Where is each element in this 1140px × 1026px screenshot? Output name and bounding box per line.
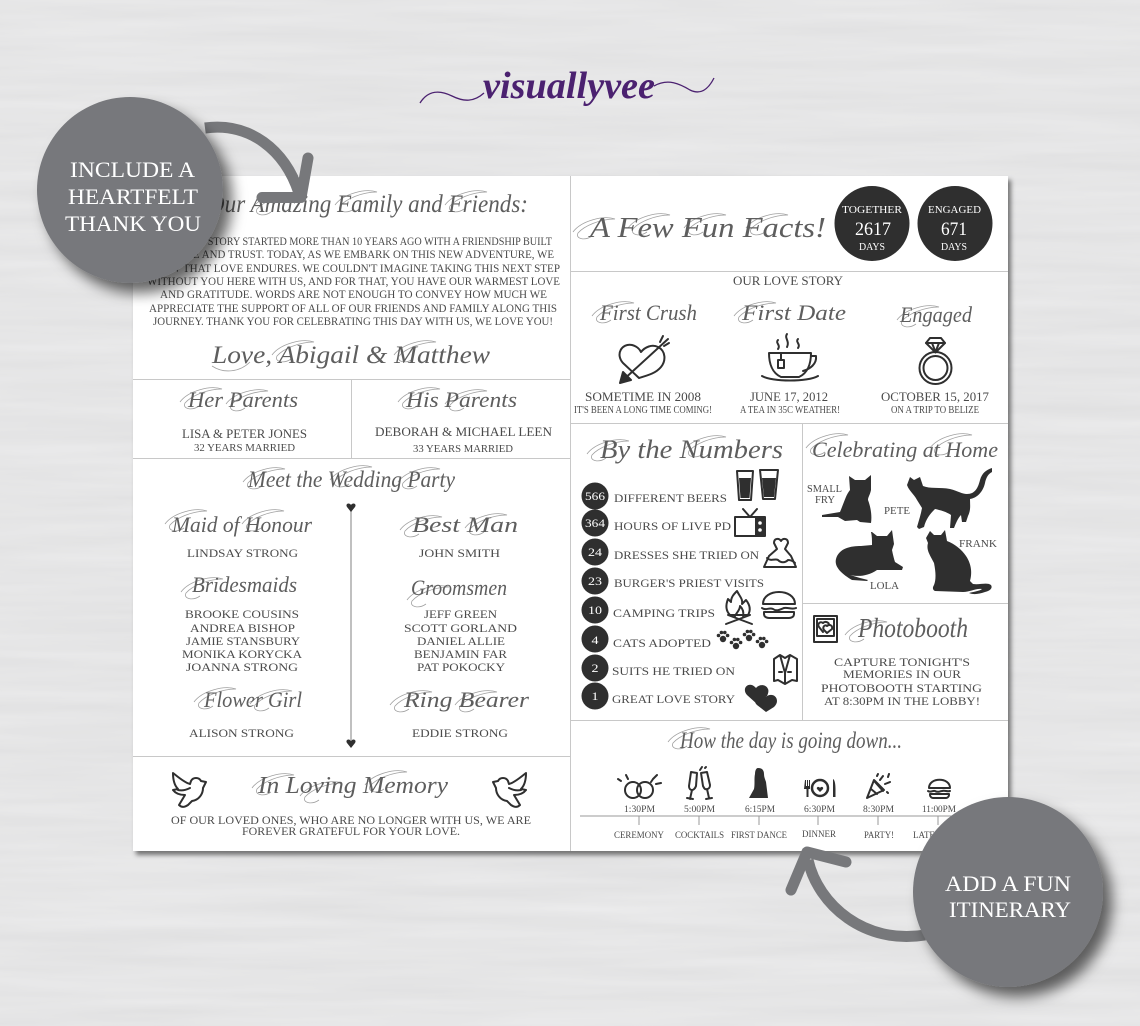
icon: plate and cutlery [804, 779, 836, 797]
stat: 10 camping trips [582, 591, 796, 624]
stat: 24 dresses she tried on: 24 [588, 545, 602, 559]
event: dinner [802, 779, 837, 840]
stat: 364 hours of live pd: 364 [585, 516, 605, 530]
icon: diamond ring [920, 338, 952, 384]
ring bearer: EDDIE STRONG [412, 726, 508, 740]
event: late night [913, 780, 965, 841]
icon: wedding dress [764, 539, 796, 567]
badge: together days [834, 186, 910, 261]
stat: 4 cats adopted: 4 [592, 633, 598, 647]
badge: together days: TOGETHER [842, 204, 903, 216]
memorial text [171, 813, 531, 838]
story: engaged: Engaged [899, 302, 973, 327]
callout: add a fun itinerary: ITINERARY [949, 897, 1071, 922]
icon: tuxedo jacket [774, 655, 797, 684]
icon: polaroid [814, 616, 837, 642]
callout: include a heartfelt thank you [37, 97, 223, 283]
icon: tea cup [762, 334, 818, 380]
cat: small fry: FRY [815, 495, 835, 506]
icon: dancing couple [749, 768, 768, 798]
story: first date: A TEA IN 35C WEATHER! [740, 405, 840, 416]
heading: by the numbers: By the Numbers [600, 435, 783, 464]
photobooth text: PHOTOBOOTH STARTING [821, 681, 982, 695]
best man [400, 512, 518, 560]
stat: 23 burger's priest visits: 23 [588, 574, 602, 588]
groomsmen: JEFF GREEN [424, 607, 497, 621]
stat: 566 different beers [582, 470, 778, 510]
letter body text: OUR LOVE STORY STARTED MORE THAN 10 YEARS AGO WITH A FRIENDSHIP BUILT [154, 234, 553, 248]
timeline axis [580, 816, 965, 825]
heading: how the day is going down: How the day is going down... [679, 728, 902, 753]
flower girl [189, 687, 302, 740]
cat: lola [836, 530, 903, 592]
best man: JOHN SMITH [419, 546, 500, 560]
stat: 10 camping trips: CAMPING TRIPS [613, 606, 715, 620]
panel: her parents [180, 387, 307, 454]
panel: photobooth [814, 613, 982, 708]
stat: 10 camping trips: 10 [588, 603, 602, 617]
letter body text: WITHOUT YOU HERE WITH US, AND FOR THAT, YOU HAVE OUR WARMEST LOVE [147, 274, 560, 288]
cat: lola: LOLA [870, 581, 899, 592]
bridesmaids: Bridesmaids [192, 572, 297, 597]
stat: 1 great love story: 1 [592, 689, 598, 703]
story: first date: JUNE 17, 2012 [750, 390, 828, 404]
heading: our love story: OUR LOVE STORY [733, 274, 843, 288]
groomsmen: DANIEL ALLIE [417, 634, 505, 648]
event: party [863, 774, 895, 841]
icon: paw prints [717, 630, 768, 649]
stat: 2 suits he tried on [582, 654, 797, 684]
event: cocktails: COCKTAILS [675, 831, 724, 841]
panel: our love story [574, 274, 989, 416]
callout: add a fun itinerary [913, 797, 1103, 987]
heading: celebrating at home: Celebrating at Home [812, 437, 998, 462]
story: engaged [881, 302, 989, 416]
groomsmen [404, 575, 517, 674]
letter body text: KNOW THAT LOVE ENDURES. WE COULDN'T IMAGINE TAKING THIS NEXT STEP [146, 261, 560, 275]
story: first crush: IT'S BEEN A LONG TIME COMING! [574, 405, 712, 416]
callout: include a heartfelt thank you: INCLUDE A [70, 157, 196, 182]
event: late night: 11:00PM [922, 805, 957, 815]
grid dividers [133, 176, 1008, 851]
event: dinner: 6:30PM [804, 805, 836, 815]
bridesmaids: JOANNA STRONG [186, 660, 298, 674]
stat: 24 dresses she tried on: DRESSES SHE TRIED ON [614, 548, 759, 562]
icon: dove left [173, 773, 206, 807]
stat: 566 different beers: DIFFERENT BEERS [614, 491, 727, 505]
maid of honour [165, 510, 312, 560]
icon: champagne glasses [687, 767, 712, 799]
bridesmaids: JAMIE STANSBURY [186, 634, 300, 648]
badge: engaged days: 671 [941, 219, 967, 240]
heading: a few fun facts: A Few Fun Facts! [588, 213, 826, 244]
panel: her parents: 32 YEARS MARRIED [194, 443, 295, 454]
panel: his parents: 33 YEARS MARRIED [413, 444, 513, 455]
story: engaged: ON A TRIP TO BELIZE [891, 405, 979, 416]
icon: television [735, 509, 765, 536]
bridesmaids: ANDREA BISHOP [190, 621, 295, 635]
bridesmaids [181, 572, 302, 674]
icon: wedding rings [618, 775, 661, 798]
ring bearer [390, 687, 530, 740]
arrow: pointing to itinerary [791, 852, 925, 937]
cat: small fry: SMALL [807, 484, 842, 495]
flower girl: Flower Girl [203, 687, 302, 712]
event: cocktails: 5:00PM [684, 805, 716, 815]
stat: 23 burger's priest visits [582, 568, 764, 594]
panel: his parents: DEBORAH & MICHAEL LEEN [375, 425, 552, 439]
heading: meet the wedding party: Meet the Wedding Party [247, 467, 456, 492]
heading: to our amazing family and friends: To Our Amazing Family and Friends: [180, 191, 528, 218]
icon: dove right [493, 773, 526, 807]
icon: burger [762, 592, 796, 618]
stat: 2 suits he tried on: 2 [592, 661, 598, 675]
badge: engaged days: DAYS [941, 242, 967, 253]
bridesmaids: BROOKE COUSINS [185, 607, 299, 621]
cat: small fry [807, 475, 871, 523]
icon: burger [928, 780, 950, 798]
photobooth text: CAPTURE TONIGHT'S [834, 655, 970, 669]
centre line with hearts [346, 504, 356, 748]
groomsmen: PAT POKOCKY [417, 660, 505, 674]
panel: itinerary timeline [580, 728, 965, 841]
event: cocktails [675, 767, 724, 841]
best man: Best Man [412, 512, 518, 537]
photobooth text: AT 8:30PM IN THE LOBBY! [824, 694, 980, 708]
stat: 566 different beers: 566 [585, 489, 605, 503]
badge: engaged days: ENGAGED [928, 204, 981, 216]
maid of honour: Maid of Honour [171, 512, 312, 537]
icon: party popper [867, 774, 890, 798]
panel: his parents: His Parents [405, 387, 517, 412]
icon: beer glasses [737, 470, 778, 500]
event: party: 8:30PM [863, 805, 895, 815]
event: dinner: DINNER [802, 830, 837, 840]
memorial text: FOREVER GRATEFUL FOR YOUR LOVE. [242, 824, 460, 838]
stat: 24 dresses she tried on [582, 538, 796, 567]
memorial text: OF OUR LOVED ONES, WHO ARE NO LONGER WITH US, WE ARE [171, 813, 531, 827]
photobooth text [821, 655, 982, 708]
logo: visuallyvee: visuallyvee [483, 65, 655, 107]
panel: her parents: LISA & PETER JONES [182, 427, 307, 441]
callout: include a heartfelt thank you: HEARTFELT [68, 184, 198, 209]
ring bearer: Ring Bearer [403, 687, 530, 712]
stat: 1 great love story: GREAT LOVE STORY [612, 692, 735, 706]
flower girl: ALISON STRONG [189, 726, 294, 740]
bridesmaids: MONIKA KORYCKA [182, 647, 302, 661]
stat: 1 great love story [582, 682, 777, 712]
story: first date [734, 300, 846, 416]
story: first crush [574, 300, 712, 416]
icon: heart with arrow [620, 336, 669, 383]
story: first crush: SOMETIME IN 2008 [585, 390, 701, 404]
panel: in loving memory [171, 771, 531, 838]
groomsmen: Groomsmen [411, 575, 507, 600]
cat: pete [884, 468, 992, 529]
event: ceremony [614, 775, 664, 841]
event: ceremony: 1:30PM [624, 805, 656, 815]
badge: together days: DAYS [859, 242, 885, 253]
letter body text: ON LOVE AND TRUST. TODAY, AS WE EMBARK ON THIS NEW ADVENTURE, WE [152, 247, 554, 261]
cat: pete: PETE [884, 506, 910, 517]
groomsmen: SCOTT GORLAND [404, 621, 517, 635]
stat: 364 hours of live pd: HOURS OF LIVE PD [614, 519, 731, 533]
badge: together days: 2617 [855, 219, 891, 240]
stat: 4 cats adopted: CATS ADOPTED [613, 636, 711, 650]
story: first date: First Date [741, 300, 846, 325]
event: ceremony: CEREMONY [614, 831, 664, 841]
badge: engaged days [918, 186, 992, 261]
stat: 2 suits he tried on: SUITS HE TRIED ON [612, 664, 735, 678]
icon: two hearts [745, 685, 777, 712]
letter body text [146, 234, 560, 328]
stat: 4 cats adopted [582, 626, 768, 652]
panel: celebrating at home [806, 434, 998, 594]
arrow: pointing to thank you heading [205, 127, 308, 198]
panel: her parents: Her Parents [187, 387, 298, 412]
event: late night: LATE NIGHT [913, 831, 965, 841]
event: first dance [731, 768, 787, 841]
heading: photobooth: Photobooth [857, 613, 968, 643]
maid of honour: LINDSAY STRONG [187, 546, 298, 560]
groomsmen: BENJAMIN FAR [414, 647, 507, 661]
callout: include a heartfelt thank you: THANK YOU [65, 211, 201, 236]
cat: frank [926, 530, 997, 594]
panel: his parents [375, 387, 552, 455]
event: party: PARTY! [864, 831, 894, 841]
event: first dance: FIRST DANCE [731, 831, 787, 841]
panel: wedding party [165, 466, 530, 748]
cat: frank: FRANK [959, 539, 997, 550]
heading: in loving memory: In Loving Memory [257, 773, 448, 799]
panel: fun facts header [573, 186, 992, 261]
stat: 364 hours of live pd [582, 509, 765, 536]
stat: 23 burger's priest visits: BURGER'S PRIEST VISITS [614, 576, 764, 590]
story: first crush: First Crush [599, 300, 697, 325]
logo: visuallyvee [420, 65, 714, 107]
printed program sheet [133, 176, 1008, 851]
photobooth text: MEMORIES IN OUR [843, 667, 961, 681]
callout: add a fun itinerary: ADD A FUN [945, 871, 1071, 896]
icon: campfire [726, 591, 752, 624]
letter body text: JOURNEY. THANK YOU FOR CELEBRATING THIS DAY WITH US, WE LOVE YOU! [153, 314, 553, 328]
panel: by the numbers [582, 435, 797, 712]
event: first dance: 6:15PM [745, 805, 776, 815]
letter body text: AND GRATITUDE. WORDS ARE NOT ENOUGH TO CONVEY HOW MUCH WE [160, 287, 547, 301]
signature: love, abigail and matthew: Love, Abigail & Matthew [211, 342, 490, 369]
panel: thank-you letter [146, 191, 560, 371]
story: engaged: OCTOBER 15, 2017 [881, 390, 989, 404]
letter body text: APPRECIATE THE SUPPORT OF ALL OF OUR FRIENDS AND FAMILY ALONG THIS [149, 301, 557, 315]
